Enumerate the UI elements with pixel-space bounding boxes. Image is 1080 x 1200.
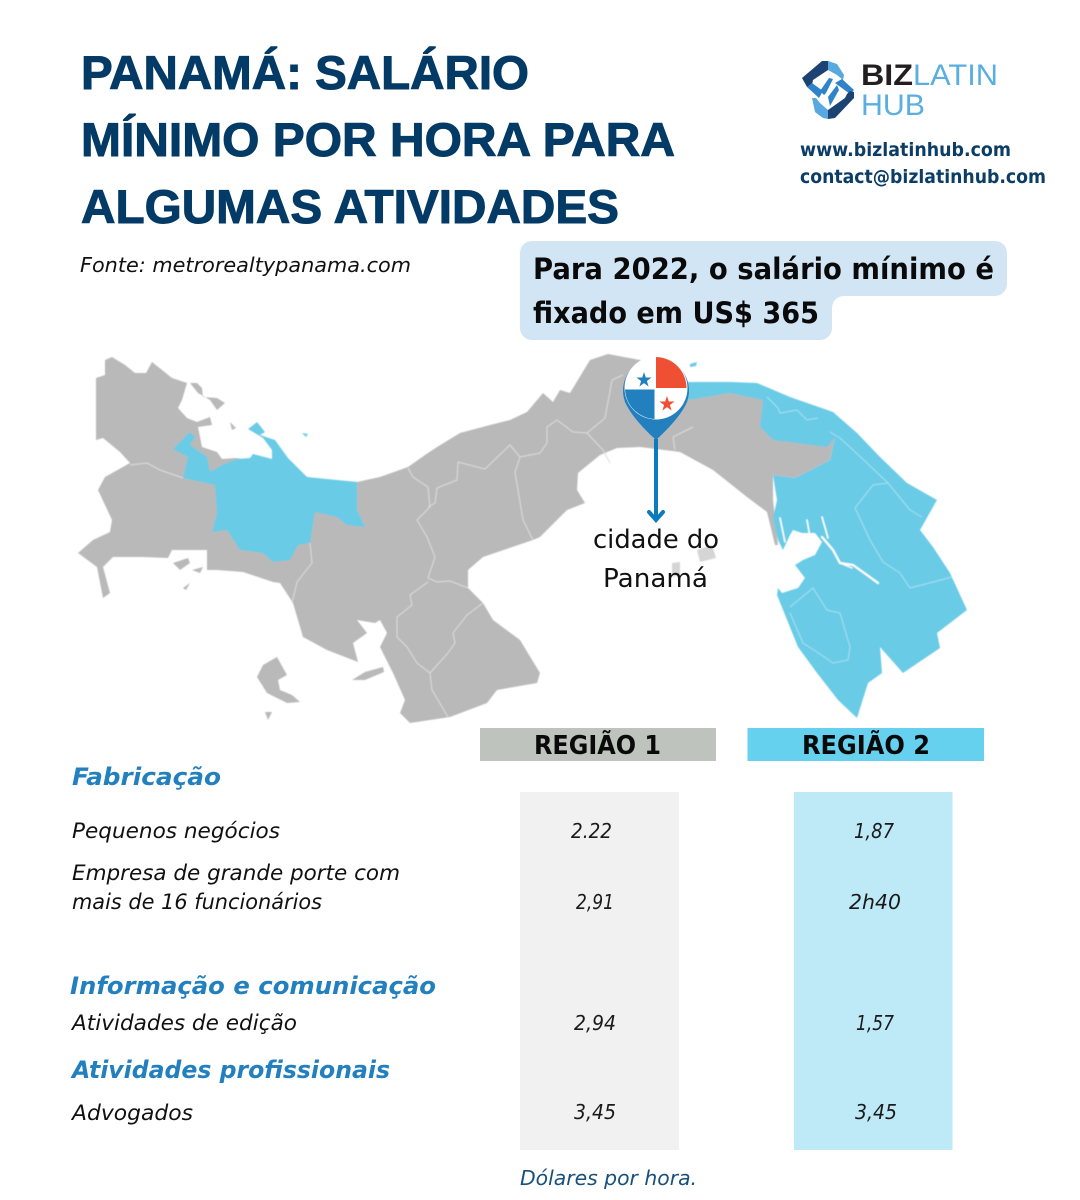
values: region 2: 3,45 bbox=[855, 1100, 897, 1124]
arrow to Panama City bbox=[649, 439, 663, 520]
heading: manufacturing: Fabricação bbox=[72, 763, 221, 791]
logo wordmark: LATIN bbox=[913, 59, 998, 92]
map: small blue islands bbox=[302, 362, 697, 437]
row: large companies bbox=[72, 861, 400, 914]
values: region 1 bbox=[571, 819, 616, 1124]
title: ALGUMAS ATIVIDADES bbox=[81, 181, 619, 234]
column background: region 2 bbox=[794, 792, 952, 1150]
map: blue eastern provinces (region 2) bbox=[687, 382, 967, 718]
row: publishing: Atividades de edição bbox=[70, 1011, 297, 1035]
logo: Biz Latin Hub bbox=[802, 59, 998, 122]
header: region 1: REGIÃO 1 bbox=[534, 729, 661, 761]
icon: map pin with Panama flag bbox=[623, 356, 689, 440]
values: region 2: 1,57 bbox=[856, 1011, 894, 1035]
callout: minimum wage: Para 2022, o salário mínimo é bbox=[533, 252, 994, 286]
heading: professional activities: Atividades profissionais bbox=[70, 1056, 390, 1084]
title bbox=[81, 46, 675, 234]
label: Panama City bbox=[593, 525, 719, 594]
values: region 1: 3,45 bbox=[574, 1100, 616, 1124]
row: lawyers: Advogados bbox=[70, 1101, 193, 1125]
map: Caribbean and Pacific islands bbox=[190, 383, 225, 410]
header: region 1 bbox=[480, 728, 716, 761]
title: MÍNIMO POR HORA PARA bbox=[81, 113, 675, 167]
map: province borders bbox=[130, 375, 952, 717]
row: small businesses: Pequenos negócios bbox=[72, 819, 280, 843]
heading: information and communication: Informação e comunicação bbox=[70, 972, 436, 1000]
footnote: Dólares por hora. bbox=[520, 1166, 697, 1190]
values: region 1: 2.22 bbox=[571, 819, 612, 843]
column background: region 1 bbox=[520, 792, 679, 1150]
values: region 2: 1,87 bbox=[854, 819, 894, 843]
contact details: contact@bizlatinhub.com bbox=[800, 166, 1046, 188]
panel: region 2 column bbox=[748, 728, 984, 1150]
values: region 2 bbox=[849, 819, 901, 1124]
label: Panama City: cidade do bbox=[593, 525, 719, 555]
row: large companies: Empresa de grande porte com bbox=[72, 861, 400, 885]
map: blue western provinces (region 2) bbox=[173, 422, 365, 562]
panel: region 1 column bbox=[480, 728, 716, 1150]
logo wordmark: BIZ bbox=[861, 59, 913, 92]
callout: minimum wage bbox=[520, 241, 1007, 340]
map: Gulf of San Miguel river channels bbox=[780, 517, 878, 583]
logo wordmark bbox=[861, 59, 998, 122]
label: Panama City: Panamá bbox=[603, 564, 708, 594]
values: region 1: 2,91 bbox=[576, 890, 614, 914]
map of Panama bbox=[78, 354, 967, 723]
title: PANAMÁ: SALÁRIO bbox=[81, 46, 529, 100]
contact details: www.bizlatinhub.com bbox=[800, 139, 1011, 161]
callout: minimum wage: fixado em US$ 365 bbox=[533, 296, 819, 330]
row labels bbox=[70, 763, 436, 1125]
values: region 1: 2,94 bbox=[574, 1011, 616, 1035]
icon: logo mark bbox=[802, 61, 854, 119]
row: large companies: mais de 16 funcionários bbox=[72, 890, 322, 914]
map: grey provinces (region 1) bbox=[78, 354, 835, 723]
source note: Fonte: metrorealtypanama.com bbox=[80, 253, 411, 277]
header: region 2: REGIÃO 2 bbox=[802, 729, 930, 761]
values: region 2: 2h40 bbox=[849, 890, 901, 914]
header: region 2 bbox=[748, 728, 984, 761]
logo wordmark: HUB bbox=[861, 89, 925, 122]
contact details bbox=[800, 139, 1046, 188]
